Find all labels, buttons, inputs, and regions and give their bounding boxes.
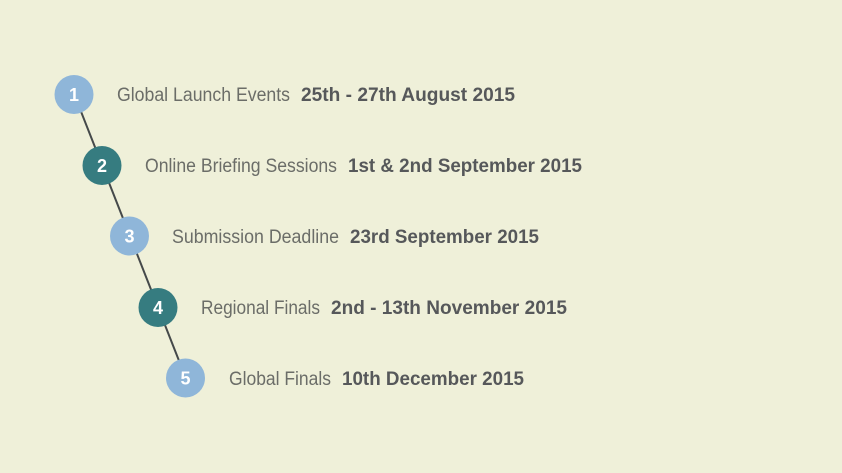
icon: step 3 circle: 3 <box>124 226 135 246</box>
icon: step 5 circle: 5 <box>180 368 191 388</box>
icon: step 5 circle <box>166 358 205 398</box>
step 1: Global Launch Events <box>54 75 515 114</box>
step 3 text: Submission Deadline <box>172 227 339 248</box>
step 2 text: 1st & 2nd September 2015 <box>348 156 582 177</box>
icon: step 3 circle <box>110 216 149 256</box>
step 3: Submission Deadline <box>110 216 539 256</box>
icon: step 4 circle: 4 <box>153 298 163 318</box>
step 1 text: 25th - 27th August 2015 <box>301 85 515 106</box>
step 4: Regional Finals <box>138 288 567 327</box>
step 4 text: 2nd - 13th November 2015 <box>331 298 567 319</box>
icon: step 1 circle <box>54 75 94 114</box>
icon: step 4 circle <box>138 288 178 327</box>
step 5 text: Global Finals <box>229 369 331 390</box>
step 3 text <box>172 227 539 248</box>
icon: step 2 circle <box>82 146 122 185</box>
icon: step 1 circle: 1 <box>69 85 79 105</box>
step 2 text <box>145 156 582 177</box>
step 2: Online Briefing Sessions <box>82 146 582 185</box>
timeline connector line <box>74 94 186 378</box>
step 3 text: 23rd September 2015 <box>350 227 539 248</box>
step 4 text <box>201 298 567 319</box>
step 1 text <box>117 85 515 106</box>
step 5: Global Finals <box>166 358 524 398</box>
step 1 text: Global Launch Events <box>117 85 290 106</box>
icon: step 2 circle: 2 <box>97 156 107 176</box>
step 5 text: 10th December 2015 <box>342 369 524 390</box>
step 4 text: Regional Finals <box>201 298 320 319</box>
step 5 text <box>229 369 524 390</box>
step 2 text: Online Briefing Sessions <box>145 156 337 177</box>
